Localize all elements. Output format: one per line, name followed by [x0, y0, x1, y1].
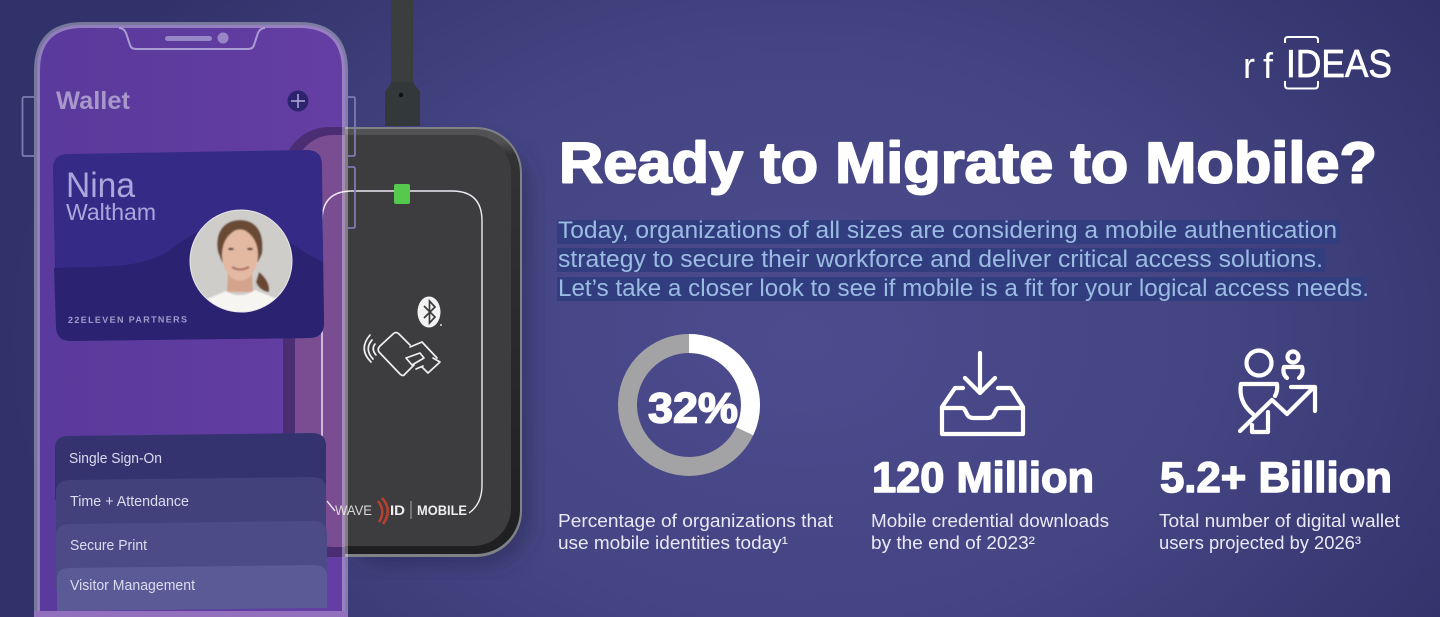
stat value: 120 Million	[872, 454, 1094, 502]
stat: 32 percent	[558, 344, 833, 553]
caption	[558, 511, 833, 553]
card wave	[54, 222, 324, 341]
stat: 120 million	[871, 353, 1109, 553]
stat value: 5.2+ Billion	[1160, 454, 1392, 502]
intro paragraph: strategy to secure their workforce and deliver critical access solutions.	[558, 246, 1323, 273]
caption: by the end of 2023²	[871, 533, 1035, 553]
logo	[1243, 37, 1392, 88]
list item: single sign-on: Single Sign-On	[69, 450, 162, 467]
list item: single sign-on	[55, 433, 326, 500]
caption	[871, 511, 1109, 553]
wallet heading: Wallet	[56, 87, 131, 115]
intro paragraph: Today, organizations of all sizes are considering a mobile authentication	[558, 217, 1337, 244]
icon: add button	[288, 90, 308, 112]
phone notch	[119, 28, 265, 49]
status LED	[394, 184, 410, 204]
card name: Nina	[66, 166, 136, 205]
phone side buttons	[22, 97, 355, 228]
phone frame	[37, 25, 345, 617]
reader cable	[385, 0, 420, 126]
caption: users projected by 2026³	[1159, 533, 1361, 553]
list item: secure print	[56, 521, 327, 590]
list item: time and attendance: Time + Attendance	[70, 493, 189, 510]
list item: visitor management	[57, 565, 327, 611]
reader brand label: MOBILE	[417, 502, 467, 518]
caption: Mobile credential downloads	[871, 511, 1109, 531]
card name	[66, 166, 156, 225]
reader brand label	[335, 498, 467, 524]
icon: download tray	[942, 353, 1023, 434]
phone	[22, 25, 355, 617]
caption	[1159, 511, 1400, 553]
intro paragraph: Let’s take a closer look to see if mobile is a fit for your logical access needs.	[558, 275, 1369, 302]
list item: secure print: Secure Print	[70, 537, 148, 554]
phone screen	[37, 25, 345, 617]
intro paragraph	[557, 217, 1369, 302]
title: Ready to Migrate to Mobile?	[559, 132, 1377, 196]
card company: 22ELEVEN PARTNERS	[68, 314, 187, 325]
reader target outline	[322, 191, 482, 513]
donut chart	[628, 344, 750, 466]
reader device	[283, 127, 530, 565]
icon: card tap	[364, 332, 440, 376]
reader brand label: ID	[390, 502, 405, 518]
list item: time and attendance	[56, 477, 326, 545]
stat: 5.2 billion	[1159, 350, 1400, 553]
identity card	[53, 150, 324, 341]
reader brand label: WAVE	[335, 502, 372, 518]
icon: users growth	[1240, 350, 1315, 432]
list item: visitor management: Visitor Management	[70, 577, 196, 594]
donut value: 32%	[648, 384, 738, 432]
caption: Percentage of organizations that	[558, 511, 833, 531]
portrait photo	[190, 210, 292, 312]
logo: IDEAS	[1286, 43, 1392, 86]
phone bottom edge	[34, 611, 348, 617]
caption: Total number of digital wallet	[1159, 511, 1400, 531]
access list	[55, 433, 327, 611]
phone speaker and camera	[165, 32, 228, 44]
icon: bluetooth	[418, 296, 442, 328]
caption: use mobile identities today¹	[558, 533, 788, 553]
logo: rf	[1243, 45, 1274, 86]
card name: Waltham	[66, 199, 156, 225]
